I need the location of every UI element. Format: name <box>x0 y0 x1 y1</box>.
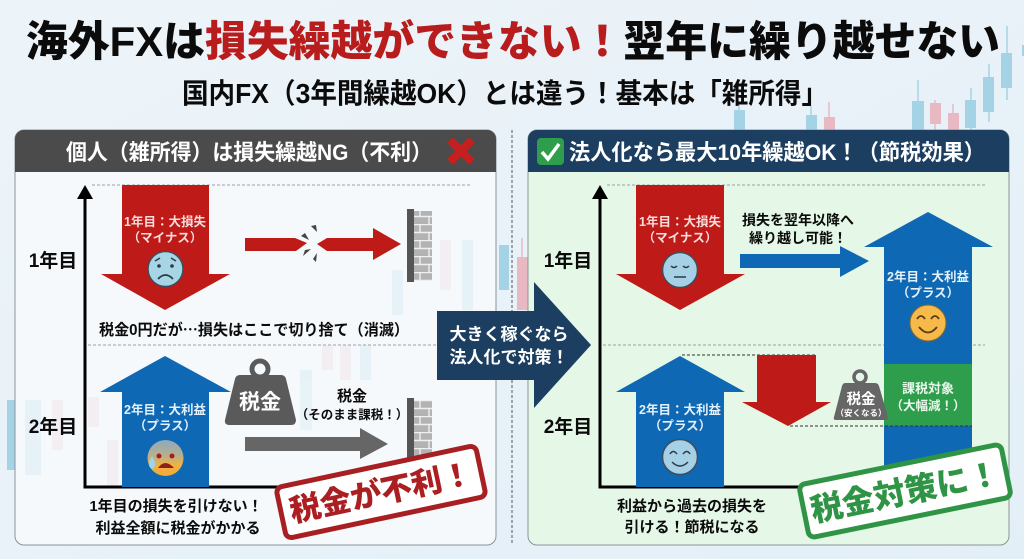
icon: tax weight: 税金 <box>239 391 281 414</box>
icon: small tax weight: 税金 <box>846 390 876 408</box>
red arrow: year 1 loss: （マイナス） <box>128 231 202 245</box>
note: carry loss forward <box>742 212 854 246</box>
icon: smiling blue face <box>662 440 698 474</box>
note: cannot offset loss <box>89 497 263 537</box>
red arrow: year 1 loss: （マイナス） <box>643 231 717 245</box>
stamp: tax countermeasure: 税金対策に！ <box>808 455 1003 529</box>
label: year 2: 2年目 <box>29 415 77 438</box>
blue arrow: year 2 profit <box>616 356 745 487</box>
label: year 1: 1年目 <box>29 249 77 272</box>
red arrow: loss deduction <box>742 355 831 426</box>
header text: individual: 個人（雑所得）は損失繰越NG（不利） <box>66 140 432 165</box>
icon: calm sleepy face <box>662 252 698 288</box>
subtitle: 国内FX（3年間繰越OK）とは違う！基本は「雑所得」 <box>182 78 828 109</box>
panel header: incorporation <box>528 130 1009 172</box>
red arrow: year 1 loss: 1年目：大損失 <box>124 214 206 229</box>
axes: incorporation <box>592 185 985 487</box>
taxable amount block: 課税対象 <box>902 381 954 396</box>
note: offset past loss <box>617 497 767 536</box>
blue arrow: year 2 profit: 2年目：大利益 <box>639 402 721 417</box>
icon: tax weight <box>225 361 296 425</box>
blue arrow: year 2 profit: （プラス） <box>134 419 196 433</box>
icon: anxious sweat face <box>148 440 184 476</box>
blue arrow: carry forward <box>740 246 869 277</box>
icon: small tax weight <box>834 371 888 420</box>
center arrow callout <box>437 282 591 408</box>
center arrow callout: 法人化で対策！ <box>450 347 568 367</box>
icon: happy yellow face <box>910 305 946 341</box>
dashed guides <box>682 355 972 426</box>
label: tax applied as is: 税金 <box>337 387 367 405</box>
center arrow callout: 大きく稼ぐなら <box>450 325 568 344</box>
label: year 2: 2年目 <box>544 415 592 438</box>
icon: red cross <box>450 140 472 162</box>
panel: incorporation <box>528 130 1011 545</box>
axes: individual <box>77 185 472 487</box>
label: year 1: 1年目 <box>544 249 592 272</box>
icon: small tax weight: （安くなる） <box>835 408 887 418</box>
stamp: tax disadvantage: 税金が不利！ <box>286 456 476 529</box>
center divider <box>511 130 513 545</box>
panel header: individual <box>15 130 496 172</box>
red arrow: year 1 loss <box>616 185 745 310</box>
panel: individual (miscellaneous income) <box>15 130 496 545</box>
blue arrow: year 2 profit: 2年目：大利益 <box>124 402 206 417</box>
taxable amount block <box>884 364 972 426</box>
big blue arrow: year 2 profit with taxable part: 2年目：大利益 <box>887 269 969 284</box>
label: tax applied as is: （そのまま課税！） <box>296 407 408 422</box>
grey arrow <box>245 428 388 459</box>
header text: incorporation: 法人化なら最大10年繰越OK！（節税効果） <box>569 140 985 165</box>
note: carry loss forward: 損失を翌年以降へ <box>742 212 854 228</box>
note: cannot offset loss: 1年目の損失を引けない！ <box>89 497 263 515</box>
taxable amount block: （大幅減！） <box>890 398 966 413</box>
blue arrow: year 2 profit: （プラス） <box>649 419 711 433</box>
big blue arrow: year 2 profit with taxable part <box>864 212 993 475</box>
note: offset past loss: 利益から過去の損失を <box>617 497 767 515</box>
icon: brick wall year 2 <box>407 398 432 462</box>
broken arrow <box>245 225 401 262</box>
icon: green check <box>537 138 564 165</box>
red arrow: year 1 loss <box>101 185 230 310</box>
note: carry loss forward: 繰り越し可能！ <box>749 230 847 246</box>
label: tax applied as is <box>296 387 408 422</box>
red arrow: year 1 loss: 1年目：大損失 <box>639 214 721 229</box>
big blue arrow: year 2 profit with taxable part: （プラス） <box>897 286 959 300</box>
icon: brick wall year 1 <box>407 209 432 282</box>
note: cannot offset loss: 利益全額に税金がかかる <box>95 519 261 537</box>
icon: worried face <box>148 252 183 286</box>
note: offset past loss: 引ける！節税になる <box>624 518 760 536</box>
blue arrow: year 2 profit <box>100 356 231 487</box>
title: 海外FXは損失繰越ができない！翌年に繰り越せない <box>26 18 1000 65</box>
note: loss discarded: 税金0円だが…損失はここで切り捨て（消滅） <box>99 318 409 340</box>
